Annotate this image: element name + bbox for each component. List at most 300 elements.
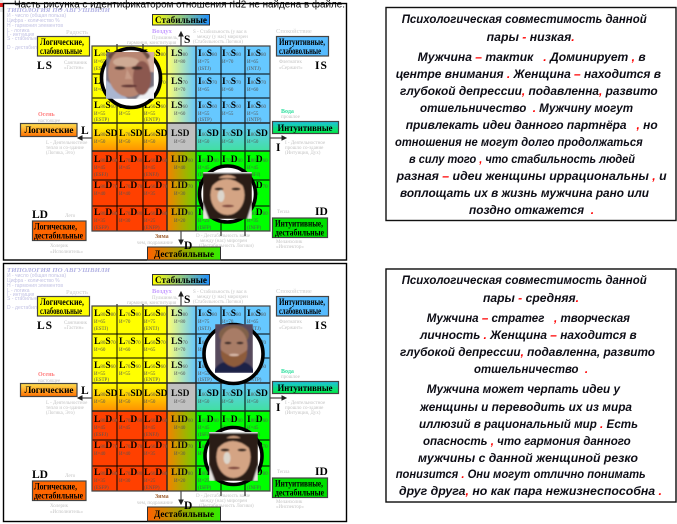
matrix cell labels: L70D70 bbox=[119, 441, 143, 451]
legend text bbox=[7, 273, 66, 311]
quadrant labels bbox=[32, 60, 328, 221]
heading: stable: Стабильные bbox=[155, 15, 207, 25]
matrix cell labels: И=50 bbox=[144, 140, 156, 145]
matrix cell labels: (ENTJ) bbox=[144, 67, 159, 72]
matrix cell labels: И=65 bbox=[144, 88, 156, 93]
matrix cell labels: И=60 bbox=[119, 348, 131, 353]
box: intuitive: Интуитивные bbox=[278, 383, 332, 393]
heading: unstable bbox=[148, 507, 220, 521]
matrix cell labels: (ESTP) bbox=[94, 118, 109, 123]
matrix cell labels: И=65 bbox=[247, 60, 259, 65]
matrix cell labels: И=60 bbox=[174, 112, 186, 117]
matrix cell labels: И=50 bbox=[198, 400, 210, 405]
box: intuitive unstable bbox=[272, 478, 328, 498]
matrix cell labels: I70D80 bbox=[222, 208, 243, 218]
matrix cell labels: (ESTP) bbox=[94, 378, 109, 383]
diagram title: ТИПОЛОГИЯ ПО АВГУШВИЛИ bbox=[7, 267, 111, 274]
legend text: I - интуиция bbox=[7, 292, 35, 298]
description text: разная – идеи женщины иррациональны , и bbox=[396, 169, 667, 183]
matrix grid bbox=[92, 304, 270, 496]
matrix cell labels: И=55 bbox=[94, 112, 106, 117]
axis arrows: S bbox=[184, 294, 190, 306]
matrix cell labels: LID60 bbox=[171, 155, 193, 165]
matrix cell labels: И=65 bbox=[144, 348, 156, 353]
matrix cell labels: L60S80 bbox=[144, 49, 166, 59]
matrix cell labels: И=35 bbox=[94, 479, 106, 484]
matrix cell labels: И=25 bbox=[198, 479, 210, 484]
matrix cell labels: LID70 bbox=[171, 441, 193, 451]
box: intuitive stable bbox=[276, 296, 328, 316]
box: intuitive unstable: Интуитивные, bbox=[275, 478, 323, 488]
outer captions: между (у нас) мирозрен bbox=[197, 35, 248, 40]
legend text: L - логика bbox=[7, 288, 30, 294]
matrix cell labels: И=45 bbox=[247, 426, 259, 431]
heading: low compatibility: Психологическая совместимость данной bbox=[402, 12, 647, 26]
description paragraph one: личность . Женщина – находится в bbox=[419, 328, 637, 342]
matrix cell labels: L70S80 bbox=[119, 49, 141, 59]
matrix cell labels: (ESTJ) bbox=[94, 67, 108, 72]
matrix cell labels: И=60 bbox=[94, 348, 106, 353]
outer captions: Спокойствие bbox=[276, 28, 312, 35]
matrix cell labels: L60D60 bbox=[144, 415, 168, 425]
matrix cell labels: И=40 bbox=[247, 452, 259, 457]
description text bbox=[395, 50, 667, 217]
matrix cell labels: I70S70 bbox=[222, 337, 242, 347]
matrix cell labels: И=45 bbox=[119, 426, 131, 431]
matrix cell labels: И=25 bbox=[144, 479, 156, 484]
quadrant labels: ID bbox=[315, 206, 328, 218]
matrix cell labels: И=30 bbox=[222, 479, 234, 484]
matrix cell labels: И=70 bbox=[119, 60, 131, 65]
matrix cell labels: I60S80 bbox=[198, 309, 218, 319]
matrix cell labels: L60D80 bbox=[144, 208, 168, 218]
outer captions: Вода bbox=[281, 109, 294, 115]
matrix cell labels: И=45 bbox=[198, 426, 210, 431]
matrix cell labels: (ENTJ) bbox=[144, 327, 159, 332]
matrix cell labels: (INFJ) bbox=[247, 433, 261, 438]
outer captions: Осень bbox=[38, 372, 56, 378]
matrix cell labels: I70D60 bbox=[222, 415, 243, 425]
matrix cell labels: И=40 bbox=[174, 426, 186, 431]
outer captions bbox=[38, 288, 326, 515]
description paragraph one: Мужчина – стратег , творческая bbox=[427, 311, 630, 325]
matrix cell labels: (ISFJ) bbox=[198, 433, 211, 438]
matrix cell labels: И=65 bbox=[198, 348, 210, 353]
quadrant labels: LS bbox=[37, 60, 53, 72]
heading: low compatibility: пары - низкая. bbox=[487, 30, 575, 44]
box: intuitive: Интуитивные bbox=[278, 123, 332, 133]
outer captions: (Стабильность Логики) bbox=[193, 40, 243, 45]
matrix cell labels: (ISFJ) bbox=[198, 173, 211, 178]
matrix cell labels: I80S70 bbox=[247, 337, 266, 347]
box: logical: Логические bbox=[24, 125, 74, 135]
matrix cell labels: И=75 bbox=[144, 320, 156, 325]
matrix cell labels: (ISFP) bbox=[198, 226, 212, 231]
matrix cell labels: И=60 bbox=[174, 372, 186, 377]
legend text: S - стабильность bbox=[7, 296, 47, 302]
matrix cell labels: L80S60 bbox=[94, 101, 116, 111]
matrix cell labels: И=20 bbox=[174, 479, 186, 484]
matrix cell labels: И=50 bbox=[247, 400, 259, 405]
matrix cell labels: (ISTJ) bbox=[198, 327, 211, 332]
description text: воплощать их в жизнь мужчина рано или bbox=[400, 186, 650, 200]
outer captions: Осень bbox=[38, 112, 56, 118]
matrix cell labels: И=55 bbox=[144, 112, 156, 117]
matrix cell labels: LID60 bbox=[171, 415, 193, 425]
matrix cell labels: И=65 bbox=[198, 88, 210, 93]
outer captions: (Дестабильность Логики) bbox=[199, 244, 254, 249]
axis arrows bbox=[78, 32, 286, 252]
matrix cell labels: И=50 bbox=[119, 400, 131, 405]
matrix cell labels: И=40 bbox=[247, 192, 259, 197]
outer captions: L - Деятельностное bbox=[46, 141, 88, 146]
description paragraph two: Мужчина может черпать идеи у bbox=[427, 382, 621, 396]
matrix cell labels: I80D80 bbox=[247, 468, 268, 478]
quadrant labels: IS bbox=[315, 320, 328, 332]
outer captions: Пульчинель, bbox=[152, 36, 178, 41]
outer captions: I - Деятельностное bbox=[285, 401, 326, 406]
box: logical unstable: дестабильные bbox=[34, 230, 83, 240]
outer captions: прошло со-здание bbox=[285, 146, 324, 151]
matrix cell labels: I80S70 bbox=[247, 77, 266, 87]
matrix cell labels: И=55 bbox=[144, 372, 156, 377]
box: intuitive stable: Интуитивные, bbox=[279, 297, 325, 307]
legend text: И - число (общая польза) bbox=[7, 273, 66, 279]
matrix cell labels: И=45 bbox=[94, 426, 106, 431]
matrix cell labels: L70SD bbox=[119, 389, 143, 399]
outer captions: «Сержант» bbox=[279, 326, 303, 331]
outer captions: тепло и со-здание bbox=[46, 406, 85, 411]
matrix cell labels: И=75 bbox=[198, 320, 210, 325]
matrix cell labels: И=60 bbox=[247, 88, 259, 93]
outer captions: Тепла bbox=[277, 210, 290, 215]
matrix cell labels: И=30 bbox=[222, 219, 234, 224]
matrix cell labels: I70SD bbox=[222, 389, 243, 399]
matrix cell labels: I70D80 bbox=[222, 468, 243, 478]
matrix cell labels: L80D80 bbox=[94, 468, 118, 478]
outer captions: между (нас) мирозрен bbox=[200, 499, 247, 504]
outer captions: между (нас) мирозрен bbox=[200, 239, 247, 244]
matrix cell labels: И=35 bbox=[94, 219, 106, 224]
matrix cell labels: И=35 bbox=[198, 192, 210, 197]
outer captions: «Гастин» bbox=[64, 326, 84, 331]
description paragraph two: понизится . Они могут отлично понимать bbox=[396, 467, 646, 481]
matrix cell labels: (INFJ) bbox=[247, 173, 261, 178]
matrix cell labels: LS80 bbox=[171, 309, 188, 319]
outer captions bbox=[38, 28, 326, 255]
outer captions: Сангвиник bbox=[64, 61, 88, 66]
matrix cell labels: И=25 bbox=[198, 219, 210, 224]
outer captions: настоящее bbox=[38, 119, 61, 124]
matrix cell labels: И=55 bbox=[198, 112, 210, 117]
axis arrows: L bbox=[81, 385, 89, 397]
matrix cell labels: И=55 bbox=[94, 372, 106, 377]
matrix cell labels: L60S70 bbox=[144, 77, 166, 87]
matrix cell labels: LS80 bbox=[171, 49, 188, 59]
matrix cell labels: I80D80 bbox=[247, 208, 268, 218]
outer captions: S - Стабильность (у вас в bbox=[193, 30, 247, 35]
matrix cell labels: I60S60 bbox=[198, 101, 218, 111]
matrix cell labels: LS60 bbox=[171, 101, 188, 111]
matrix cell labels: И=50 bbox=[198, 140, 210, 145]
matrix cell labels: И=55 bbox=[222, 372, 234, 377]
matrix cell labels: И=30 bbox=[174, 452, 186, 457]
matrix cell labels: I70D70 bbox=[222, 181, 243, 191]
matrix cell labels: LS70 bbox=[171, 77, 188, 87]
matrix cell labels: (ENFP) bbox=[144, 486, 160, 491]
outer captions: S - Стабильность (у вас в bbox=[193, 290, 247, 295]
legend text: Н - гармония элементов bbox=[7, 283, 63, 289]
matrix cell labels: И=45 bbox=[144, 166, 156, 171]
description paragraph one: отшельничество . bbox=[474, 362, 588, 376]
outer captions: Зима bbox=[155, 234, 169, 240]
outer captions: Холерик bbox=[50, 504, 69, 509]
matrix cell labels: LS60 bbox=[171, 361, 188, 371]
matrix cell labels: L60SD bbox=[144, 389, 168, 399]
outer captions: тепло и со-здание bbox=[46, 146, 85, 151]
heading: medium compatibility bbox=[402, 273, 647, 305]
quadrant labels: LD bbox=[32, 209, 48, 221]
matrix cell labels: И=40 bbox=[119, 452, 131, 457]
matrix cell labels: I80S60 bbox=[247, 101, 266, 111]
outer captions: Пульчинель, bbox=[152, 296, 178, 301]
description paragraph one: глубокой депрессии, подавленна, развито bbox=[400, 345, 655, 359]
matrix cell labels: LID80 bbox=[171, 468, 193, 478]
outer captions: гармония, конституция bbox=[127, 301, 177, 306]
matrix cell labels: И=50 bbox=[94, 140, 106, 145]
outer captions: Сангвиник bbox=[64, 321, 88, 326]
heading: low compatibility bbox=[402, 12, 647, 44]
matrix cell labels: (INTP) bbox=[247, 378, 262, 383]
matrix cell labels: И=45 bbox=[222, 166, 234, 171]
box: intuitive unstable bbox=[272, 218, 328, 238]
heading: unstable: Дестабильные bbox=[154, 509, 214, 519]
outer captions: Тепла bbox=[277, 470, 290, 475]
outer captions: гармония, конституция bbox=[127, 41, 177, 46]
matrix cell labels: I60SD bbox=[198, 129, 219, 139]
matrix cell labels: I80S80 bbox=[247, 309, 266, 319]
matrix cell labels: I80D70 bbox=[247, 181, 268, 191]
matrix cell labels: И=80 bbox=[174, 320, 186, 325]
axis arrows: D bbox=[184, 240, 192, 252]
matrix cell labels: И=30 bbox=[119, 219, 131, 224]
matrix cell labels bbox=[94, 49, 268, 231]
matrix cell labels: L70S80 bbox=[119, 309, 141, 319]
matrix cell labels: L60S70 bbox=[144, 337, 166, 347]
matrix cell labels: I80SD bbox=[247, 129, 268, 139]
description text: отшельничество . Мужчину могут bbox=[420, 101, 633, 115]
matrix cell labels: I80S80 bbox=[247, 49, 266, 59]
matrix cell labels: И=25 bbox=[144, 219, 156, 224]
matrix cell labels: I60S70 bbox=[198, 337, 218, 347]
matrix cell labels: L70S60 bbox=[119, 101, 141, 111]
matrix cell labels: И=60 bbox=[119, 88, 131, 93]
description text: поздно откажется . bbox=[469, 203, 594, 217]
matrix cell labels: И=75 bbox=[144, 60, 156, 65]
diagram title: ТИПОЛОГИЯ ПО АВГУШВИЛИ bbox=[7, 7, 111, 14]
matrix cell labels: И=40 bbox=[174, 166, 186, 171]
legend text: Н - гармония элементов bbox=[7, 23, 63, 29]
matrix cell labels: L80D60 bbox=[94, 415, 118, 425]
matrix cell labels: L80S80 bbox=[94, 309, 116, 319]
matrix cell labels: L80S70 bbox=[94, 77, 116, 87]
matrix cell labels: И=55 bbox=[222, 112, 234, 117]
matrix cell labels: L60D70 bbox=[144, 441, 168, 451]
portrait: bearded man in ring bbox=[204, 324, 263, 384]
legend text: S - стабильность bbox=[7, 36, 47, 42]
matrix cell labels: И=75 bbox=[198, 60, 210, 65]
matrix cell labels: И=65 bbox=[94, 60, 106, 65]
matrix cell labels: I60D80 bbox=[198, 468, 219, 478]
matrix cell labels: И=65 bbox=[247, 320, 259, 325]
matrix cell labels: L60S60 bbox=[144, 101, 166, 111]
outer captions: I - Деятельностное bbox=[285, 141, 326, 146]
outer captions: настоящее bbox=[38, 379, 61, 384]
matrix cell labels: И=70 bbox=[119, 320, 131, 325]
matrix cell labels: И=20 bbox=[174, 219, 186, 224]
legend text: I - интуиция bbox=[7, 32, 35, 38]
legend text bbox=[7, 13, 66, 51]
matrix cell labels: I70S80 bbox=[222, 309, 242, 319]
matrix cell labels: И=45 bbox=[247, 166, 259, 171]
axis arrows: D bbox=[184, 500, 192, 512]
matrix cell labels: (ESFJ) bbox=[94, 433, 108, 438]
box: logical unstable: Логические, bbox=[34, 222, 77, 232]
matrix cell labels: I70S80 bbox=[222, 49, 242, 59]
box: logical stable: слабовольные bbox=[40, 46, 82, 56]
panel: text, medium compatibility bbox=[386, 269, 676, 502]
matrix cell labels: И=55 bbox=[247, 112, 259, 117]
matrix cell labels: И=80 bbox=[174, 60, 186, 65]
outer captions: Воздух bbox=[152, 28, 173, 35]
legend text: Цифра - количество % bbox=[7, 278, 60, 284]
matrix cell labels: (ISTJ) bbox=[198, 67, 211, 72]
matrix cell labels: L70S60 bbox=[119, 361, 141, 371]
matrix cell labels: I70S60 bbox=[222, 361, 242, 371]
axis arrows: L bbox=[81, 125, 89, 137]
matrix cell labels: LS70 bbox=[171, 337, 188, 347]
box: intuitive stable bbox=[276, 36, 328, 56]
legend text: D - дестабильность bbox=[7, 45, 53, 51]
portrait: man in ring bbox=[102, 47, 160, 108]
matrix cell labels: L70D70 bbox=[119, 181, 143, 191]
matrix cell labels: LSD bbox=[171, 129, 190, 139]
box: logical stable: Логические, bbox=[40, 37, 84, 47]
matrix cell labels: (ENFP) bbox=[144, 226, 160, 231]
description text: отношения не могут долго продолжаться bbox=[395, 135, 643, 149]
matrix cell labels: (ENFJ) bbox=[144, 433, 159, 438]
legend text: L - логика bbox=[7, 28, 30, 34]
matrix cell labels: (ESFJ) bbox=[94, 173, 108, 178]
matrix cell labels: L70S70 bbox=[119, 77, 141, 87]
matrix cell labels: И=35 bbox=[247, 479, 259, 484]
matrix cell labels: И=40 bbox=[94, 452, 106, 457]
matrix cell labels: И=60 bbox=[94, 88, 106, 93]
matrix cell labels: I60SD bbox=[198, 389, 219, 399]
box: logical bbox=[20, 124, 77, 136]
axis arrows bbox=[78, 292, 286, 512]
matrix cell labels: (ISFP) bbox=[198, 486, 212, 491]
legend text: И - число (общая польза) bbox=[7, 13, 66, 19]
outer captions: прошло со-здание bbox=[285, 406, 324, 411]
axis arrows: I bbox=[276, 142, 281, 154]
box: logical stable bbox=[38, 296, 90, 316]
outer captions: «Гастин» bbox=[64, 66, 84, 71]
matrix cell labels: (ENTP) bbox=[144, 378, 160, 383]
matrix cell labels: И=70 bbox=[222, 60, 234, 65]
box: logical bbox=[20, 384, 77, 396]
description text: Мужчина – тактик . Доминирует , в bbox=[418, 50, 646, 64]
box: logical unstable: Логические, bbox=[34, 482, 77, 492]
matrix cell labels: И=45 bbox=[94, 166, 106, 171]
matrix cell labels bbox=[94, 309, 268, 491]
matrix cell labels: И=45 bbox=[144, 426, 156, 431]
matrix cell labels: L60S80 bbox=[144, 309, 166, 319]
outer captions: Спокойствие bbox=[276, 288, 312, 295]
matrix cell labels: И=35 bbox=[144, 192, 156, 197]
matrix cell labels: (ESTJ) bbox=[94, 327, 108, 332]
outer captions: Флегматик bbox=[279, 320, 302, 325]
outer captions: «Исполнитель» bbox=[50, 250, 83, 255]
matrix cell labels: И=55 bbox=[247, 372, 259, 377]
matrix cell labels: И=55 bbox=[119, 372, 131, 377]
matrix cell labels: И=35 bbox=[144, 452, 156, 457]
outer captions: Воздух bbox=[152, 288, 173, 295]
outer captions: между (у нас) мирозрен bbox=[197, 295, 248, 300]
matrix cell labels: I70D70 bbox=[222, 441, 243, 451]
matrix grid bbox=[92, 44, 270, 236]
matrix cell labels: И=55 bbox=[198, 372, 210, 377]
axis arrows: S bbox=[184, 34, 190, 46]
matrix cell labels: И=50 bbox=[222, 140, 234, 145]
matrix cell labels: И=50 bbox=[222, 400, 234, 405]
matrix cell labels: LID70 bbox=[171, 181, 193, 191]
box: logical unstable: дестабильные bbox=[34, 490, 83, 500]
matrix cell labels: L60D80 bbox=[144, 468, 168, 478]
legend text: D - дестабильность bbox=[7, 305, 53, 311]
matrix cell labels: L80D60 bbox=[94, 155, 118, 165]
matrix cell labels: I60D60 bbox=[198, 155, 219, 165]
matrix cell labels: И=60 bbox=[222, 88, 234, 93]
quadrant labels bbox=[32, 320, 328, 481]
matrix cell labels: I80D60 bbox=[247, 415, 268, 425]
matrix cell labels: I60S80 bbox=[198, 49, 218, 59]
matrix cell labels: (ISTP) bbox=[198, 378, 212, 383]
box: intuitive unstable: Интуитивные, bbox=[275, 218, 323, 228]
matrix cell labels: I60D60 bbox=[198, 415, 219, 425]
outer captions: Меланхолик bbox=[276, 240, 303, 245]
outer captions: Флегматик bbox=[279, 60, 302, 65]
panel: typology diagram, low compatibility bbox=[4, 4, 346, 260]
outer captions: Лето bbox=[65, 474, 76, 479]
matrix cell labels: (INFP) bbox=[247, 486, 262, 491]
matrix cell labels: L70D60 bbox=[119, 155, 143, 165]
matrix cell labels: I80D70 bbox=[247, 441, 268, 451]
matrix cell labels: И=70 bbox=[222, 320, 234, 325]
matrix cell labels: L60D70 bbox=[144, 181, 168, 191]
description paragraph two: мужчины с данной женщиной резко bbox=[418, 451, 638, 465]
outer captions: Меланхолик bbox=[276, 500, 303, 505]
outer captions: (Дестабильность Логики) bbox=[199, 504, 254, 509]
matrix cell labels: И=50 bbox=[174, 140, 186, 145]
matrix cell labels: (ISTP) bbox=[198, 118, 212, 123]
matrix cell labels: (INTP) bbox=[247, 118, 262, 123]
matrix cell labels: И=45 bbox=[119, 166, 131, 171]
outer captions: Радость bbox=[66, 29, 88, 36]
matrix cell labels: И=50 bbox=[94, 400, 106, 405]
outer captions: (Стабильность Логики) bbox=[193, 300, 243, 305]
matrix cell labels: И=30 bbox=[119, 479, 131, 484]
